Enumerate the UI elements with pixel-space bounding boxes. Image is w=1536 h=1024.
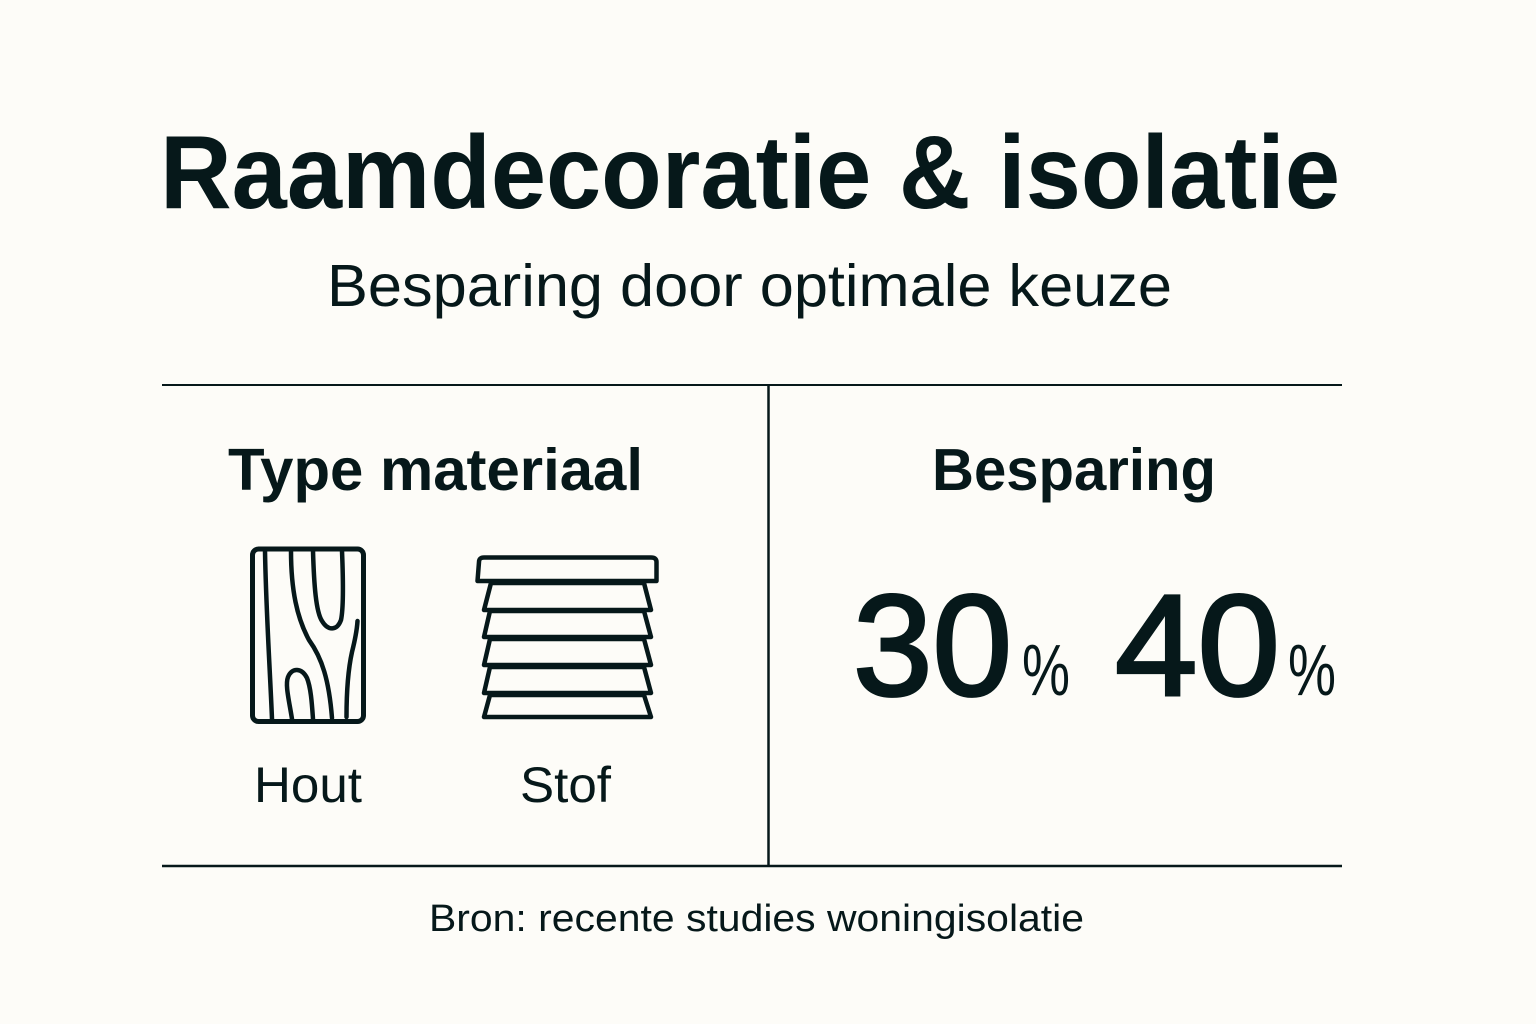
stat: 40 percent: 40 [1115,565,1280,726]
panel: besparing [853,437,1336,726]
icon: wood plank [252,549,364,722]
heading: besparing: Besparing [932,437,1216,503]
label: stof: Stof [520,757,611,813]
title: Raamdecoratie & isolatie [160,115,1340,231]
label: hout: Hout [254,757,362,813]
icon: fabric blinds [478,558,656,717]
stat: 40 percent: % [1288,631,1336,711]
panel: type materiaal [228,437,656,813]
stat: 30 percent: % [1022,631,1070,711]
stat: 30 percent: 30 [853,565,1012,726]
source note: Bron: recente studies woningisolatie [429,898,1084,940]
heading: type materiaal: Type materiaal [228,437,643,503]
subtitle: Besparing door optimale keuze [327,253,1172,319]
